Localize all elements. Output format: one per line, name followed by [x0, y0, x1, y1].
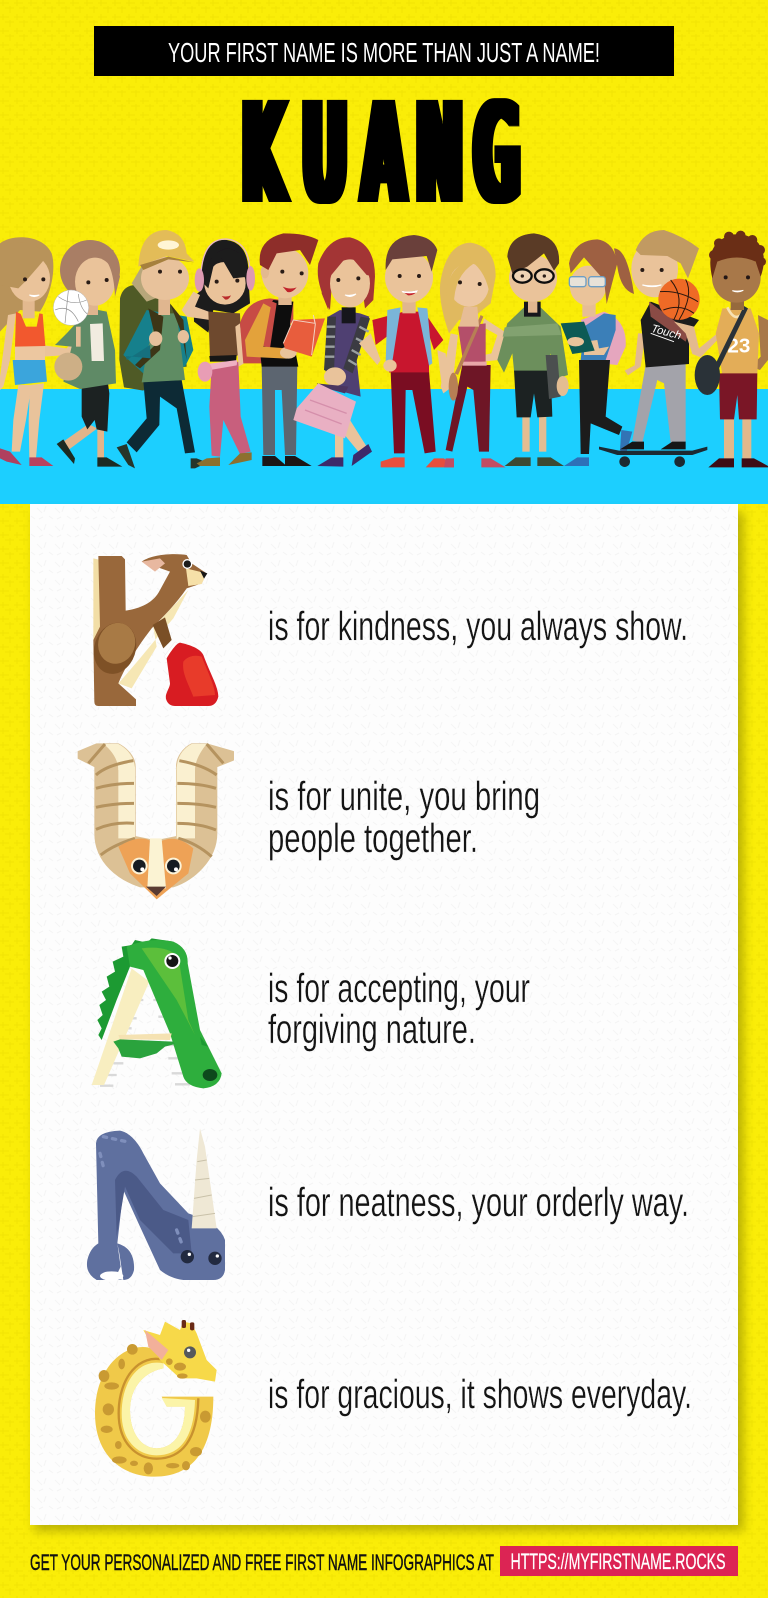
panel shadow: [34, 512, 744, 1531]
text: U lines: [268, 773, 540, 861]
person 9: boy with glasses: [497, 233, 569, 466]
letter K: kangaroo: [87, 554, 218, 706]
person 11: boy on skateboard with basketball: Touch: [650, 323, 682, 342]
text: A lines: is for accepting, your: [268, 965, 530, 1011]
person 11: boy on skateboard with basketball: [599, 230, 721, 467]
text: A lines: forgiving nature.: [268, 1006, 476, 1052]
title: name: KUANG: [242, 73, 520, 236]
letter A: alligator: [92, 938, 222, 1088]
text: U lines: people together.: [268, 815, 478, 861]
white content panel: [30, 504, 738, 1525]
text: U lines: is for unite, you bring: [268, 773, 540, 819]
letter N: narwhal: [87, 1128, 225, 1281]
person 12: boy in yellow tank: 23: [727, 335, 750, 358]
person 8: blonde girl: [440, 243, 507, 467]
header banner: [94, 26, 674, 76]
letter U: bushbaby: [78, 744, 233, 899]
person 1: girl with orange top: [0, 237, 82, 466]
person 5: boy with red book: [240, 233, 325, 466]
person 4: girl with headphones: [182, 239, 255, 466]
text: A lines: [268, 965, 530, 1052]
footer call to action: GET YOUR PERSONALIZED AND FREE FIRST NAME INFOGRAPHICS AT: [30, 1550, 494, 1575]
person 2: girl with volleyball: [53, 240, 122, 467]
person 10: girl with ponytail and tablet: [561, 239, 634, 466]
person 12: boy in yellow tank: [695, 231, 768, 467]
person 6: girl with pink bag: [293, 237, 375, 467]
illustration: crowd of people right half: [359, 230, 768, 467]
illustration: crowd of people left half: [0, 230, 375, 468]
person 3: backpacker with cap: [117, 230, 207, 468]
letter G: giraffe: [95, 1320, 217, 1477]
blue floor band: [0, 389, 768, 504]
person 7: boy in red shirt: [359, 235, 454, 467]
